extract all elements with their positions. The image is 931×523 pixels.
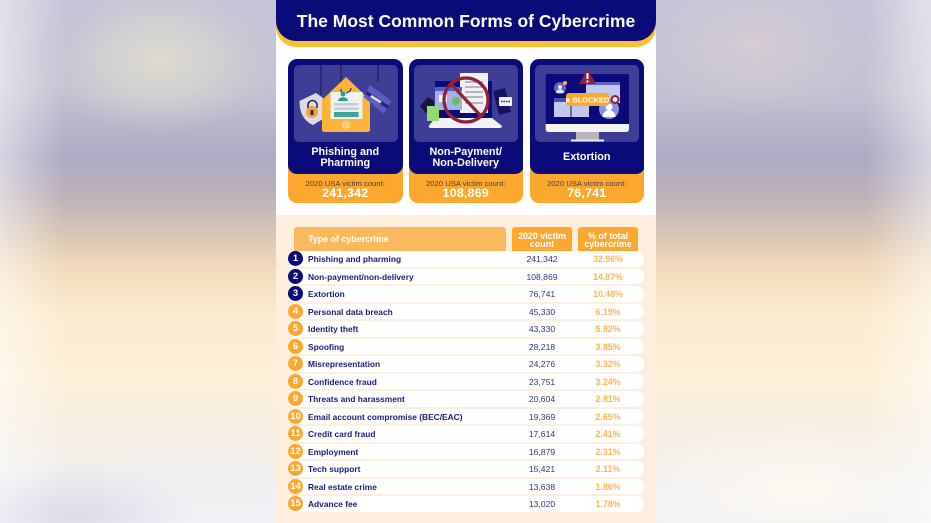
victim count label: 2020 USA victim count: <box>547 178 626 188</box>
row 5: 43,330 <box>529 324 555 334</box>
icon: blocked computer monitor: ■ BLOCKED <box>566 95 610 104</box>
table header: type of cybercrime <box>294 227 506 251</box>
row 11: Credit card fraud <box>308 429 375 439</box>
row 4 <box>288 304 644 319</box>
row 9: 9 <box>293 393 298 404</box>
table header: type of cybercrime: Type of cybercrime <box>308 234 389 244</box>
row 3: 76,741 <box>529 289 555 299</box>
row 4: Personal data breach <box>308 306 393 316</box>
row 9: Threats and harassment <box>308 394 405 404</box>
card name: Pharming <box>320 157 370 169</box>
row 3: Extortion <box>308 289 345 299</box>
row 10 <box>288 408 644 424</box>
panel: phishing and pharming <box>288 59 402 203</box>
panel: extortion <box>530 59 644 203</box>
row 13: 2.11% <box>596 464 620 474</box>
row 6: Spoofing <box>308 342 344 352</box>
peach table background <box>276 215 656 523</box>
icon: laptop with prohibition sign <box>414 65 518 142</box>
card name: Extortion <box>563 151 610 163</box>
panel: non-payment / non-delivery <box>408 59 523 203</box>
row 15: Advance fee <box>308 499 357 509</box>
card name: Phishing and <box>311 146 379 158</box>
row 14: 13,638 <box>529 482 555 492</box>
title banner <box>276 0 656 47</box>
row 13: Tech support <box>308 464 360 474</box>
row 10: Email account compromise (BEC/EAC) <box>308 412 463 422</box>
row 9 <box>288 391 644 406</box>
row 8: Confidence fraud <box>308 376 377 386</box>
row 3: 10.48% <box>593 289 623 299</box>
row 8: 3.24% <box>596 376 620 386</box>
row 3: 3 <box>293 288 298 299</box>
row 13 <box>288 461 644 476</box>
row 6: 6 <box>293 340 298 352</box>
row 11: 2.41% <box>596 429 620 439</box>
row 8: 23,751 <box>529 376 555 386</box>
row 12 <box>288 444 644 459</box>
row 14 <box>288 478 644 494</box>
row 12: Employment <box>308 446 358 456</box>
row 5: 5 <box>293 323 298 334</box>
row 4: 45,330 <box>529 306 555 316</box>
infographic sheet <box>276 0 656 523</box>
row 1: 1 <box>293 253 298 264</box>
row 15 <box>288 496 644 512</box>
row 1 <box>288 251 644 266</box>
row 4: 6.19% <box>596 306 620 316</box>
row 2: 108,869 <box>526 272 558 282</box>
row 4: 4 <box>293 306 298 316</box>
row 7: 24,276 <box>529 359 555 369</box>
victim count: 241,342 <box>322 186 368 200</box>
row 9: 20,604 <box>529 394 555 404</box>
victim count: 76,741 <box>567 186 606 200</box>
row 13: 15,421 <box>529 464 555 474</box>
row 2: 2 <box>293 270 298 282</box>
row 12: 12 <box>290 446 301 456</box>
row 11: 17,614 <box>529 429 555 439</box>
victim count label: 2020 USA victim count: <box>306 178 385 188</box>
row 8: 8 <box>293 376 298 386</box>
row 1: 241,342 <box>526 254 558 264</box>
row 12: 2.31% <box>596 446 620 456</box>
row 15: 13,020 <box>529 499 555 509</box>
icon: phishing hooks, envelope, shield and card <box>294 65 398 142</box>
card name <box>429 146 502 169</box>
card name <box>311 146 379 169</box>
table header: victim count <box>512 227 572 251</box>
row 10: 19,369 <box>529 412 555 422</box>
row 14: 1.86% <box>596 482 620 492</box>
card name: Non-Payment/ <box>429 146 502 158</box>
row 5: 5.92% <box>596 324 620 334</box>
row 1: Phishing and pharming <box>308 254 401 264</box>
row 15: 15 <box>290 498 301 509</box>
row 10: 10 <box>290 410 301 422</box>
row 2: 14.87% <box>593 272 623 282</box>
row 13: 13 <box>290 463 301 474</box>
row 8 <box>288 374 644 389</box>
table header: victim count: 2020 victim <box>518 231 566 241</box>
row 14: 14 <box>290 480 301 492</box>
row 10: 2.65% <box>596 412 620 422</box>
row 7: Misrepresentation <box>308 359 380 369</box>
row 1: 32.96% <box>593 254 623 264</box>
row 9: 2.81% <box>596 394 620 404</box>
row 11: 11 <box>290 428 301 439</box>
table header: percent of total: % of total <box>588 231 628 241</box>
row 7: 3.32% <box>596 359 620 369</box>
row 5 <box>288 321 644 336</box>
table header: victim count: count <box>530 239 554 249</box>
table header: percent of total <box>578 227 638 251</box>
row 11 <box>288 426 644 442</box>
table header: percent of total: cybercrime <box>584 239 632 249</box>
row 12: 16,879 <box>529 446 555 456</box>
row 7 <box>288 356 644 372</box>
row 15: 1.78% <box>596 499 620 509</box>
title: The Most Common Forms of Cybercrime <box>297 11 635 31</box>
victim count: 108,869 <box>443 186 489 200</box>
row 2: Non-payment/non-delivery <box>308 272 414 282</box>
row 5: Identity theft <box>308 324 358 334</box>
victim count label: 2020 USA victim count: <box>426 178 505 188</box>
row 6: 28,218 <box>529 342 555 352</box>
row 2 <box>288 268 644 284</box>
row 6 <box>288 338 644 354</box>
row 7: 7 <box>293 358 298 369</box>
row 6: 3.85% <box>596 342 620 352</box>
row 14: Real estate crime <box>308 482 377 492</box>
row 3 <box>288 286 644 302</box>
card name: Non-Delivery <box>432 157 499 169</box>
icon: blocked computer monitor <box>535 65 639 142</box>
